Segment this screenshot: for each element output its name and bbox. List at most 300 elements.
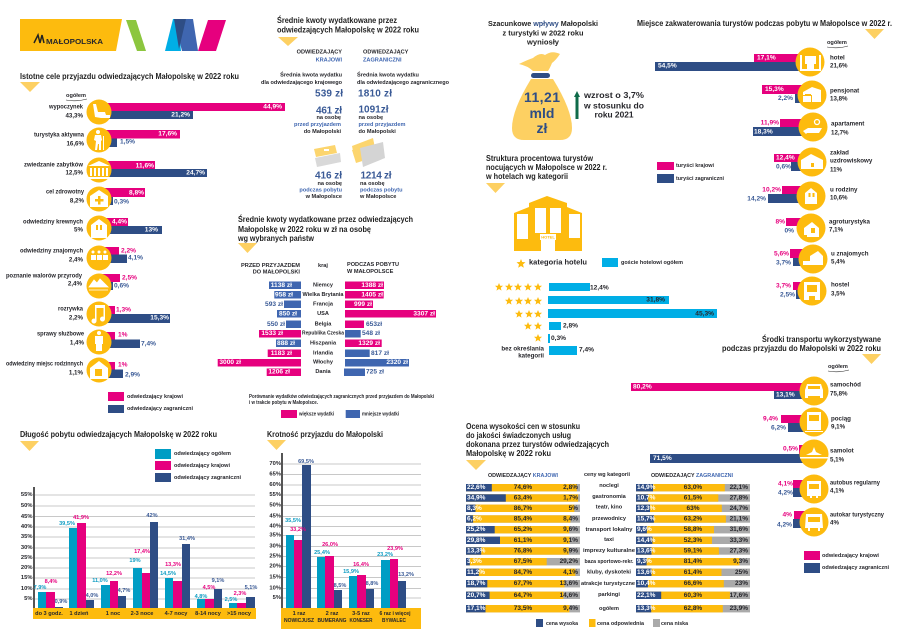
row: samochód: 13,1%	[776, 392, 795, 398]
grouped bar chart: BUMERANG	[318, 618, 346, 624]
row: apartament: 12,7%	[831, 130, 849, 136]
grouped bar chart: 15%	[269, 574, 281, 580]
column: foreign visitors: na osobę	[358, 115, 383, 121]
row: autobus regularny: 4,1%	[778, 480, 793, 488]
grouped bar chart: 42%	[146, 513, 158, 519]
grouped bar chart: 10%	[269, 586, 281, 592]
grouped bar chart: 1 raz	[293, 611, 306, 617]
row: odwiedziny krewnych: 13%	[145, 226, 158, 234]
table: foreign visitors: 81,4%	[684, 558, 702, 565]
grouped bar chart: 4-7 nocy	[165, 611, 188, 617]
row: pensjonat	[762, 80, 859, 110]
row: samolot: 5,1%	[830, 456, 845, 464]
comparison note and legend	[249, 394, 435, 418]
table: foreign visitors: 58,8%	[684, 526, 702, 533]
legend	[516, 258, 683, 268]
column headers	[241, 262, 399, 276]
comparison note and legend: i w trakcie pobytu w Małopolsce.	[249, 400, 319, 406]
grouped bar chart: 9,1%	[212, 578, 224, 584]
row: autobus regularny: 4,2%	[778, 490, 793, 496]
bar chart: hotel category: 45,3%	[695, 310, 714, 318]
diverging bars by country: 958 zł	[275, 292, 293, 298]
column label: total: ogółem	[828, 364, 848, 370]
row: u rodziny: 10,2%	[762, 186, 781, 194]
text: growth note: roku 2021	[594, 110, 634, 120]
row: apartament: 18,3%	[754, 128, 773, 136]
text: growth note	[583, 90, 645, 120]
row: hotel: 17,1%	[757, 54, 776, 62]
price categories: teatr, kino	[596, 505, 623, 511]
comparison note and legend: mniejsze wydatki	[362, 412, 400, 418]
row: turystyka aktywna: 16,6%	[66, 140, 84, 148]
row: odwiedziny znajomych: 2,4%	[69, 256, 83, 264]
table: foreign visitors: 52,3%	[684, 537, 702, 544]
legend: cena niska	[661, 621, 689, 627]
diverging bars by country: 3307 zł	[413, 310, 435, 318]
heading: price assessment: Małopolskę w 2022 roku	[466, 448, 551, 458]
table: foreign visitors: 23%	[735, 580, 748, 587]
heading: hotel structure: nocujących w Małopolsce w 2022 r.	[486, 162, 607, 172]
panel: frequency of arrival	[267, 429, 421, 629]
column: domestic visitors: do Małopolski	[304, 129, 341, 135]
table: domestic visitors: 22,6%	[467, 484, 486, 491]
diverging bars by country: 2320 zł	[386, 359, 408, 366]
row: pociąg: 6,2%	[771, 424, 786, 432]
table: domestic visitors: 67,7%	[514, 580, 532, 587]
icon: money bag with value: zł	[537, 120, 548, 136]
row: cel zdrowotny: 8,2%	[70, 198, 84, 204]
grouped bar chart: 5,1%	[245, 585, 257, 591]
row: rozrywka: 2,2%	[69, 314, 83, 322]
heading: length of stay: Długość pobytu odwiedzających Małopolskę w 2022 roku	[20, 429, 217, 439]
row: turystyka aktywna: 1,5%	[120, 138, 135, 146]
row: zwiedzanie zabytków: zwiedzanie zabytków	[24, 162, 83, 168]
legend: cena odpowiednia	[597, 621, 645, 627]
column headers: kraj	[318, 263, 328, 269]
grouped bar chart: 11,0%	[92, 578, 108, 584]
column: domestic visitors: 461 zł	[316, 106, 342, 116]
table: domestic visitors: 25,2%	[467, 526, 486, 533]
grouped bar chart: 23,9%	[387, 546, 403, 552]
row: hostel: hostel	[831, 282, 850, 288]
row: zwiedzanie zabytków: 12,5%	[65, 170, 83, 176]
row: samochód: 75,8%	[830, 390, 848, 398]
row: agroturystyka: 8%	[775, 218, 785, 226]
row: odwiedziny krewnych: 5%	[74, 226, 83, 234]
bar chart: hotel category: 7,4%	[579, 346, 594, 354]
table: foreign visitors: 12,3%	[637, 505, 656, 512]
grouped bar chart: 30%	[21, 545, 32, 551]
price categories: imprezy kulturalne	[583, 548, 635, 554]
grouped bar chart: 1 noc	[106, 611, 120, 617]
grouped bar chart: 50%	[21, 503, 32, 509]
row: turystyka aktywna: turystyka aktywna	[34, 132, 85, 138]
row: zakład uzdrowiskowy: 0,6%	[776, 164, 791, 170]
row: u rodziny: 10,6%	[830, 194, 848, 202]
table: domestic visitors	[466, 473, 580, 612]
grouped bar chart: 2 raz	[326, 611, 339, 617]
grouped bar chart	[269, 453, 421, 629]
row: pensjonat: 15,3%	[765, 86, 784, 93]
table: domestic visitors: 85,4%	[514, 516, 532, 522]
panel: transport	[631, 333, 889, 573]
row: wypoczynek: 44,9%	[263, 104, 282, 110]
legend: turyści zagraniczni	[676, 176, 724, 182]
row: poznanie walorów przyrody: 2,4%	[68, 280, 82, 288]
table: domestic visitors: 9,1%	[563, 537, 578, 544]
column: domestic visitors: na osobę	[316, 115, 341, 121]
column: foreign visitors: przed przyjazdem	[358, 122, 405, 128]
icon: hotel building: HOTEL	[541, 234, 555, 240]
price categories: gastronomia	[592, 494, 627, 500]
grouped bar chart: 2,5%	[225, 597, 237, 603]
icon: money bag with value: 11,21	[524, 89, 560, 105]
table: foreign visitors: 9,3%	[637, 558, 652, 565]
row: hostel: 3,7%	[776, 282, 791, 290]
comparison note and legend: większe wydatki	[298, 412, 335, 418]
heading: length of stay	[20, 429, 217, 451]
row: autobus regularny: autobus regularny	[830, 480, 881, 486]
table: domestic visitors: 13,3%	[467, 548, 486, 554]
column: domestic visitors: w Małopolsce	[305, 194, 342, 200]
row: odwiedziny krewnych: odwiedziny krewnych	[23, 218, 83, 226]
row: odwiedziny znajomych: 2,2%	[121, 248, 136, 254]
heading: price assessment: Ocena wysokości cen w stosunku	[466, 421, 580, 431]
grouped bar chart: KONESER	[350, 618, 372, 624]
table: foreign visitors: 61,5%	[684, 494, 702, 502]
column label: total: ogółem	[66, 93, 86, 99]
column headers: W MAŁOPOLSCE	[347, 269, 394, 275]
heading: spending by country: Średnie kwoty wydatkowane przez odwiedzających	[238, 213, 413, 224]
column headers: PODCZAS POBYTU	[347, 262, 399, 268]
bar chart: hotel category: 2,8%	[563, 322, 578, 330]
row: u rodziny: u rodziny	[830, 186, 858, 194]
heading: spending by country	[237, 213, 413, 253]
table: domestic visitors: 61,1%	[514, 537, 532, 544]
table: domestic visitors: 65,2%	[514, 526, 532, 533]
row: poznanie walorów przyrody: 0,6%	[114, 282, 129, 290]
table: foreign visitors: ODWIEDZAJĄCY ZAGRANICZNI	[651, 473, 733, 479]
diverging bars by country: Francja	[313, 301, 334, 307]
grouped bar chart: 8,5%	[334, 583, 346, 589]
price categories: baza sportowo-rekr.	[584, 559, 634, 565]
price categories: transport lokalny	[586, 527, 633, 533]
logo banner: MAŁOPOLSKA	[46, 37, 104, 46]
diverging bars by country: Dania	[315, 369, 332, 375]
price categories: ogółem	[599, 606, 619, 612]
table: foreign visitors: 62,8%	[684, 605, 702, 612]
heading: frequency of arrival	[267, 429, 383, 450]
row: hostel	[776, 276, 850, 306]
diverging bars by country: Republika Czeska	[302, 331, 345, 337]
grouped bar chart: 20%	[21, 565, 32, 571]
row: autobus regularny	[778, 474, 881, 504]
legend: odwiedzający ogółem	[174, 451, 231, 457]
heading: hotel structure	[485, 153, 607, 193]
table: domestic visitors: 8,4%	[563, 516, 578, 522]
legend: goście hotelowi ogółem	[621, 260, 683, 266]
grouped bar chart: 8,8%	[366, 581, 378, 587]
column: foreign visitors: dla odwiedzającego zagranicznego	[357, 80, 450, 86]
column: foreign visitors: 1810 zł	[358, 88, 392, 100]
row: hotel: hotel	[830, 54, 845, 62]
table: foreign visitors: 14,4%	[637, 537, 656, 544]
table: domestic visitors: 2,8%	[563, 484, 578, 491]
table: domestic visitors: ODWIEDZAJĄCY KRAJOWI	[488, 473, 558, 479]
diverging bars by country: Irlandia	[313, 350, 334, 356]
row: samolot: 0,5%	[783, 446, 798, 452]
legend	[657, 162, 724, 183]
row: zwiedzanie zabytków	[24, 158, 207, 182]
grouped bar chart: >15 nocy	[227, 611, 252, 617]
legend: odwiedzający zagraniczni	[127, 406, 193, 412]
row: hostel: 2,5%	[780, 292, 795, 298]
heading: purposes of visit: Istotne cele przyjazdu odwiedzających Małopolskę w 2022 roku	[20, 71, 239, 81]
column: foreign visitors	[357, 50, 450, 200]
column: domestic visitors: przed przyjazdem	[294, 122, 341, 128]
row: u znajomych: 3,7%	[776, 260, 791, 266]
diverging bars by country	[218, 282, 436, 376]
legend: odwiedzający krajowi	[822, 553, 879, 559]
table: domestic visitors: 9,9%	[563, 548, 578, 554]
row: samochód: samochód	[830, 382, 861, 388]
grouped bar chart: 39,5%	[59, 521, 75, 527]
grouped bar chart: 0,9%	[55, 599, 67, 605]
table: foreign visitors: 13,6%	[637, 548, 656, 554]
column: foreign visitors: 1091zł	[358, 104, 389, 116]
table: foreign visitors: 10,4%	[637, 580, 656, 587]
row: sprawy służbowe: 1,4%	[70, 340, 84, 346]
legend	[155, 449, 241, 482]
row: odwiedziny miejsc rodzinnych: 2,9%	[125, 372, 140, 378]
row: pensjonat: pensjonat	[830, 88, 859, 94]
heading: frequency of arrival: Krotność przyjazdu do Małopolski	[267, 429, 383, 439]
grouped bar chart: 41,9%	[73, 515, 89, 521]
column: foreign visitors: na osobę	[360, 181, 385, 187]
row: poznanie walorów przyrody: poznanie walorów przyrody	[6, 272, 83, 280]
row: zakład uzdrowiskowy: 12,4%	[776, 154, 795, 162]
table: foreign visitors: 14,9%	[637, 484, 656, 491]
row: poznanie walorów przyrody	[6, 272, 137, 298]
price categories: ceny wg kategorii	[584, 472, 630, 478]
arrow: growth	[574, 91, 580, 119]
price categories: noclegi	[599, 483, 619, 489]
column: domestic visitors: 416 zł	[315, 170, 342, 182]
grouped bar chart: 25%	[21, 555, 32, 561]
heading: average spending: odwiedzających Małopolskę w 2022 roku	[277, 24, 419, 34]
table: foreign visitors: 25%	[735, 569, 748, 576]
bar chart: hotel category: 0,3%	[551, 335, 566, 342]
row: odwiedziny miejsc rodzinnych: 1%	[118, 362, 128, 368]
row: rozrywka	[58, 302, 170, 326]
table: domestic visitors: 18,7%	[467, 580, 486, 587]
grouped bar chart: BYWALEC	[382, 618, 406, 624]
grouped bar chart: 45%	[21, 514, 32, 520]
column: foreign visitors: podczas pobytu	[360, 188, 403, 194]
row: sprawy służbowe: 7,4%	[141, 340, 156, 348]
bar chart: hotel category: bez określania	[501, 346, 545, 352]
icon: banknotes small	[314, 145, 341, 167]
column: foreign visitors: do Małopolski	[358, 129, 396, 135]
grouped bar chart: 13,3%	[165, 562, 181, 568]
legend: odwiedzający zagraniczni	[822, 565, 889, 571]
row: hostel: 3,5%	[831, 290, 846, 298]
column: domestic visitors: podczas pobytu	[299, 188, 343, 194]
row: samochód	[631, 376, 861, 406]
diverging bars by country: 1206 zł	[268, 368, 290, 376]
heading: hotel structure: w hotelach wg kategorii	[485, 171, 568, 181]
bar chart: hotel category: 12,4%	[590, 284, 609, 292]
table: foreign visitors: 63,2%	[684, 516, 702, 522]
row: pensjonat: 13,8%	[830, 96, 848, 102]
column: foreign visitors: ODWIEDZAJĄCY	[363, 50, 409, 56]
table: foreign visitors: 23,9%	[730, 605, 748, 612]
row: cel zdrowotny: 8,8%	[129, 190, 144, 196]
grouped bar chart: 70%	[269, 461, 281, 467]
grouped bar chart: 55%	[21, 492, 32, 498]
diverging bars by country: 888 zł	[277, 340, 295, 347]
diverging bars by country: 653zł	[366, 321, 382, 328]
table: domestic visitors: 5%	[569, 505, 578, 512]
grouped bar chart: 15,9%	[343, 569, 359, 575]
row: zakład uzdrowiskowy	[774, 148, 873, 176]
price categories: taxi	[604, 537, 614, 543]
table: foreign visitors: 27,3%	[730, 548, 748, 554]
grouped bar chart: 19%	[129, 558, 141, 564]
row: zakład uzdrowiskowy: 11%	[830, 166, 843, 174]
heading: transport	[722, 333, 881, 364]
heading: hotel structure: Struktura procentowa turystów	[486, 153, 593, 163]
heading: tourism revenue: Szacunkowe wpływy Małopolski	[488, 18, 598, 28]
row: odwiedziny miejsc rodzinnych: 1,1%	[69, 370, 83, 376]
table: domestic visitors: 29,2%	[560, 558, 578, 565]
heading: purposes of visit	[20, 71, 239, 92]
row: turystyka aktywna: 17,6%	[158, 130, 177, 138]
icon: money bag with value: mld	[530, 105, 554, 121]
row: odwiedziny krewnych: 4,4%	[112, 218, 127, 226]
grouped bar chart: 40%	[269, 524, 281, 530]
table: domestic visitors: 20,7%	[467, 592, 486, 599]
table: domestic visitors: 76,8%	[514, 548, 532, 554]
grouped bar chart: 25%	[269, 554, 281, 560]
grouped bar chart: 4,5%	[203, 585, 215, 591]
row: wypoczynek	[48, 100, 285, 124]
table: foreign visitors: 33,3%	[730, 537, 748, 544]
row: zwiedzanie zabytków: 24,7%	[186, 170, 205, 176]
diverging bars by country: 999 zł	[354, 301, 372, 308]
column label: total: ogółem	[827, 40, 847, 46]
column: domestic visitors: Średnia kwota wydatku	[280, 72, 343, 78]
diverging bars by country: 850 zł	[279, 310, 297, 318]
grouped bar chart: 69,5%	[298, 459, 314, 465]
row: hotel: 21,6%	[830, 62, 848, 70]
row: odwiedziny krewnych	[23, 216, 162, 240]
grouped bar chart: 6 raz i więcej	[380, 611, 411, 617]
table: domestic visitors: 64,7%	[514, 592, 532, 599]
panel: price assessment	[466, 421, 750, 627]
row: u znajomych: 5,6%	[774, 250, 789, 258]
row: agroturystyka: 0%	[784, 228, 794, 234]
grouped bar chart: 8,4%	[45, 579, 57, 585]
heading: tourism revenue	[488, 18, 598, 46]
row: pociąg: 9,1%	[831, 424, 846, 430]
text: growth note: wzrost o 3,7%	[583, 90, 645, 100]
diverging bars by country: Hiszpania	[310, 340, 337, 346]
row: agroturystyka	[775, 214, 870, 242]
table: foreign visitors: 22,1%	[730, 484, 748, 491]
table: domestic visitors: 1,7%	[563, 494, 578, 502]
row: odwiedziny znajomych: odwiedziny znajomych	[20, 248, 83, 254]
table: domestic visitors: 11,2%	[467, 569, 485, 576]
grouped bar chart: 35%	[269, 532, 281, 538]
row: wypoczynek: 21,2%	[171, 112, 190, 118]
grouped bar chart: 25,4%	[314, 550, 330, 556]
grouped bar chart: 8-14 nocy	[195, 611, 222, 617]
bar chart: hotel category: kategorii	[518, 352, 544, 360]
diverging bars by country: 1329 zł	[358, 340, 380, 347]
row: wypoczynek: 43,3%	[65, 112, 83, 120]
table: foreign visitors: 15,7%	[637, 516, 656, 522]
grouped bar chart: 31,4%	[179, 536, 195, 542]
table: foreign visitors: 63%	[686, 505, 700, 512]
grouped bar chart: 4,0%	[86, 593, 98, 599]
table: domestic visitors: 34,9%	[467, 494, 486, 502]
table: foreign visitors: 13,3%	[637, 605, 656, 612]
heading: price assessment	[466, 421, 609, 470]
row: apartament	[753, 112, 864, 142]
price categories: atrakcje turystyczne	[581, 581, 635, 587]
heading: spending by country: wg wybranych państw	[237, 233, 314, 243]
grouped bar chart: 14,5%	[160, 571, 176, 577]
table: domestic visitors: 9,6%	[563, 526, 578, 533]
grouped bar chart: 45%	[269, 514, 281, 520]
grouped bar chart: 7,9%	[34, 585, 46, 591]
bar chart: hotel category: 31,8%	[646, 296, 665, 304]
row: agroturystyka: 7,1%	[829, 226, 844, 234]
row: hotel	[655, 48, 848, 76]
row: cel zdrowotny: 0,3%	[114, 198, 129, 206]
table: foreign visitors: 27,8%	[730, 494, 748, 502]
grouped bar chart: 2-3 noce	[131, 611, 153, 617]
row: sprawy służbowe: 1%	[118, 332, 128, 338]
legend: odwiedzający krajowi	[174, 463, 230, 469]
column: foreign visitors: w Małopolsce	[359, 194, 396, 200]
grouped bar chart: 60%	[269, 482, 281, 488]
panel: spending by country	[218, 213, 436, 418]
row: autokar turystyczny: autokar turystyczny	[830, 512, 885, 518]
table: domestic visitors: 63,4%	[514, 494, 532, 502]
row: zakład uzdrowiskowy: uzdrowiskowy	[830, 158, 873, 164]
column: domestic visitors: na osobę	[317, 181, 342, 187]
legend: kategoria hotelu	[529, 258, 587, 266]
row: turystyka aktywna	[34, 128, 180, 152]
grouped bar chart: 2,3%	[234, 591, 246, 597]
row: poznanie walorów przyrody: 2,5%	[122, 274, 137, 282]
row: samolot: 71,5%	[653, 455, 672, 462]
grouped bar chart: 5%	[273, 595, 281, 601]
table: domestic visitors: 9,4%	[563, 605, 578, 612]
table: foreign visitors: 61,4%	[684, 569, 702, 576]
grouped bar chart: 4,8%	[195, 594, 207, 600]
legend: odwiedzający krajowi	[127, 394, 183, 400]
grouped bar chart: 16,4%	[353, 562, 369, 568]
icon: money bag with value	[512, 52, 572, 140]
panel: average spending	[261, 14, 450, 200]
price categories: parkingi	[598, 592, 620, 598]
table: domestic visitors: 13,6%	[560, 580, 578, 587]
row: autokar turystyczny: 4%	[830, 520, 839, 526]
price categories: przewodnicy	[592, 516, 627, 522]
